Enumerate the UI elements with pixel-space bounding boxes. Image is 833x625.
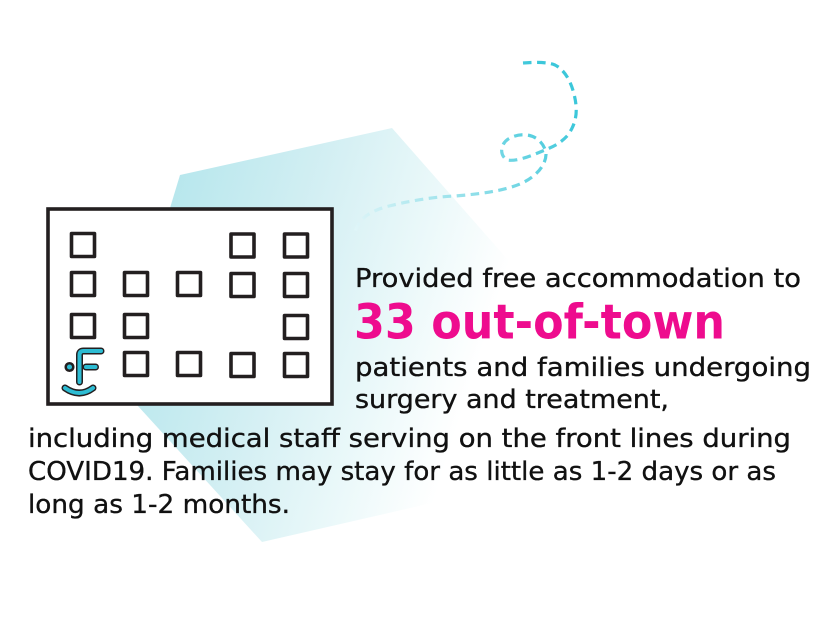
icon: smiling F logo	[65, 351, 101, 393]
text block: accommodation: Provided free accommodation to	[355, 264, 801, 294]
text block: accommodation: including medical staff serving on the front lines during	[28, 424, 791, 454]
building with windows	[48, 209, 332, 404]
windows	[72, 234, 308, 376]
text block: accommodation: surgery and treatment,	[355, 385, 669, 415]
text block: accommodation	[28, 264, 811, 520]
dashed flight path	[355, 62, 576, 232]
text block: accommodation: COVID19. Families may stay for as little as 1-2 days or as	[28, 457, 776, 487]
background polygon	[117, 128, 530, 542]
headline number: 33 out-of-town	[354, 294, 725, 350]
building outline	[48, 209, 332, 404]
text block: accommodation: patients and families undergoing	[355, 353, 811, 383]
text block: accommodation: long as 1-2 months.	[28, 490, 290, 520]
